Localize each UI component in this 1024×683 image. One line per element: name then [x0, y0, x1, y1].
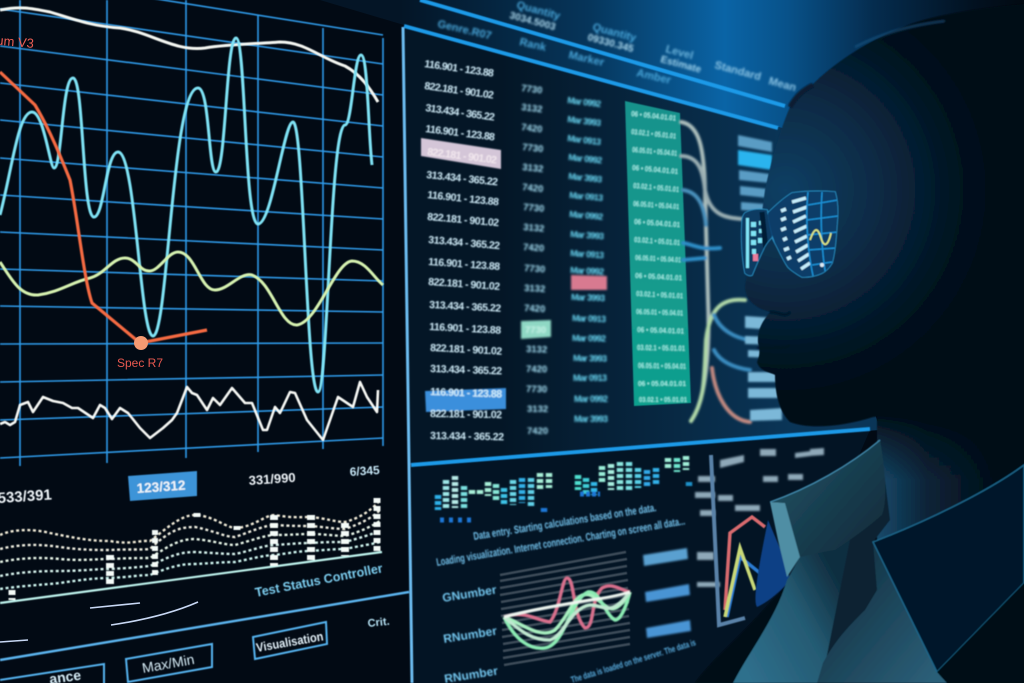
column 2: codes: 3132	[522, 162, 544, 175]
column 1: ranges: 822.181 - 901.02	[424, 80, 495, 102]
status messages: Loading visualization. Internet connection. Charting on screen all data...	[436, 516, 686, 569]
column 1: ranges: 116.901 - 123.88	[427, 189, 500, 209]
chart caption: Test Status Controller	[254, 561, 384, 600]
shirt dark base	[733, 440, 937, 683]
column 3: dates: Mar 0992	[568, 152, 603, 166]
point label: Spec R7	[117, 356, 163, 370]
column 3: dates: Mar 3993	[574, 414, 608, 424]
column 1: ranges: 313.434 - 365.22	[430, 430, 504, 443]
teal column	[625, 101, 691, 406]
column 1: ranges: 313.434 - 365.22	[425, 102, 496, 124]
teal column: 06 • 05.04.01.01	[631, 109, 676, 123]
right collar	[873, 465, 1024, 672]
column 2: codes: 7420	[521, 122, 543, 136]
column 3: dates: Mar 3993	[567, 114, 602, 128]
dot columns	[12, 498, 377, 600]
column 2: codes: 7730	[523, 202, 545, 215]
table headers: Standard	[713, 59, 762, 83]
teal column: 06.05.01 • 05.04.01	[638, 361, 686, 371]
teal column: 03.02.1 • 05.01.01	[637, 343, 685, 353]
dotted wave chart	[0, 498, 382, 603]
highlighted counter	[128, 471, 197, 501]
highlighted blue row: 116.901 - 123.88	[430, 386, 502, 401]
highlighted green code: 7730	[525, 325, 546, 336]
column 1: ranges: 313.434 - 365.22	[426, 169, 499, 189]
teal column: 06.05.01 • 05.04.01	[635, 253, 681, 264]
table panel background	[404, 27, 880, 465]
teal column: 06.05.01 • 05.04.01	[632, 145, 677, 158]
teal column: 06.05.01 • 05.04.01	[633, 199, 679, 211]
column 1: ranges: 313.434 - 365.22	[430, 363, 502, 378]
highlighted green code	[521, 320, 551, 339]
column 3: dates: Mar 0913	[570, 248, 604, 260]
balance button	[0, 664, 104, 683]
column 3: dates: Mar 0992	[570, 265, 604, 277]
column 1: ranges: 313.434 - 365.22	[429, 299, 502, 315]
neck shadow under jaw	[877, 400, 1024, 485]
yellow-green line	[0, 252, 383, 325]
row labels: GNumber	[441, 583, 498, 605]
top header band glow	[320, 0, 1024, 300]
column 2: codes: 3132	[521, 102, 543, 116]
counters row: 331/990	[248, 470, 296, 488]
column 2: codes: 3132	[526, 344, 547, 356]
column 1: ranges: 116.901 - 123.88	[425, 123, 496, 144]
highlighted blue row	[425, 386, 506, 412]
dark jacket	[695, 578, 790, 683]
column 3: dates: Mar 0992	[572, 333, 606, 344]
column 2: codes: 7730	[521, 83, 543, 97]
teal column: 06 • 05.04.01.01	[635, 271, 682, 282]
bar dot chart right	[578, 456, 689, 496]
lips	[757, 312, 790, 348]
table headers: Estimate	[659, 54, 703, 76]
shirt front strip	[733, 538, 850, 683]
row labels	[441, 583, 499, 683]
teal column: 03.02.1 • 05.01.01	[631, 127, 676, 141]
connector curves	[681, 122, 750, 422]
orange line	[0, 72, 207, 350]
collar edge band	[770, 502, 800, 577]
column 3: dates: Mar 3993	[570, 229, 604, 241]
max/min button: Max/Min	[141, 651, 196, 676]
left lens reflection	[741, 208, 772, 276]
status messages: Data entry. Starting calculations based on the data.	[473, 502, 657, 543]
column 3: dates: Mar 0992	[567, 95, 602, 109]
column 2: codes: 7420	[527, 426, 548, 437]
teal column: 06 • 05.04.01.01	[637, 325, 684, 336]
table headers: Marker	[567, 49, 606, 69]
table headers: Rank	[518, 36, 548, 54]
table headers: Mean	[767, 75, 798, 94]
lower shirt	[817, 542, 947, 683]
column 1: ranges: 313.434 - 365.22	[428, 234, 501, 252]
table headers: Quantity	[515, 0, 562, 23]
column 2: codes: 3132	[523, 222, 545, 235]
right lens reflection	[768, 190, 840, 282]
column 3: dates: Mar 0913	[567, 133, 602, 147]
column 3: dates: Mar 0992	[569, 209, 604, 222]
column 2: codes: 7420	[526, 364, 547, 375]
column 1: ranges: 116.901 - 123.88	[428, 256, 501, 273]
cyan oscillating line	[0, 38, 372, 392]
column 3: dates: Mar 3993	[573, 353, 607, 364]
stripe line chart	[500, 552, 630, 665]
table headers: 09330.345	[586, 32, 635, 55]
sketch strokes	[0, 602, 198, 642]
highlighted row	[421, 138, 501, 169]
highlighted row: 822.181 - 901.02	[427, 146, 498, 167]
column 3: dates: Mar 0913	[572, 313, 606, 324]
column 3: dates: Mar 3993	[571, 292, 605, 303]
teal column: 03.02.1 • 05.01.01	[636, 289, 683, 300]
column 3: dates: Mar 0913	[573, 373, 607, 383]
left collar	[770, 440, 885, 577]
person	[695, 4, 1024, 683]
column 1: ranges	[421, 58, 506, 443]
white upper line	[0, 8, 378, 102]
column 2: codes: 7730	[522, 142, 544, 155]
teal column: 03.02.1 • 05.01.01	[634, 235, 680, 247]
column 2: codes: 7730	[526, 384, 547, 395]
value pills	[643, 548, 691, 638]
row labels: RNumber	[442, 624, 498, 646]
column 1: ranges: 116.901 - 123.88	[429, 321, 502, 337]
highlighted red date	[571, 275, 607, 290]
column 3: dates: Mar 0913	[569, 190, 604, 203]
counters row	[0, 463, 380, 507]
column 2: codes: 7420	[524, 303, 546, 315]
column 2: codes: 3132	[524, 283, 546, 295]
column 1: ranges: 822.181 - 901.02	[428, 276, 501, 293]
status labels column	[738, 135, 782, 421]
table headers: 3034.5003	[508, 10, 557, 33]
left chart panel	[0, 0, 383, 466]
status messages	[436, 502, 697, 683]
column 1: ranges: 822.181 - 901.02	[430, 342, 503, 358]
hair edge	[790, 21, 945, 107]
column 1: ranges: 116.901 - 123.88	[424, 58, 495, 80]
blue shirt reflection	[755, 520, 790, 607]
head silhouette	[745, 4, 1024, 426]
teal column: 06 • 05.04.01.01	[634, 217, 680, 229]
column 3: dates	[567, 95, 608, 424]
status messages: The data is loaded on the server. The data is	[570, 637, 697, 683]
column 2: codes: 7420	[523, 242, 545, 254]
table headers: Amber	[635, 67, 673, 87]
white noisy line	[0, 382, 378, 440]
teal column: 06 • 05.04.01.01	[632, 163, 678, 176]
column 2: codes: 3132	[527, 404, 548, 415]
counters row: 6/345	[349, 463, 380, 479]
button row	[0, 616, 390, 683]
chart grid	[0, 0, 383, 466]
column 3: dates: Mar 3993	[568, 171, 603, 185]
bar dot chart left	[438, 473, 549, 520]
highlighted counter: 123/312	[136, 478, 186, 496]
teal column: 06 • 05.04.01.01	[638, 379, 686, 388]
teal column: 03.02.1 • 05.01.01	[639, 395, 687, 404]
sunglasses	[740, 190, 840, 282]
mini line chart	[695, 448, 824, 625]
dark lower right	[937, 583, 1024, 683]
neck	[877, 400, 1024, 683]
table headers: Quantity	[591, 21, 638, 45]
teal column: 03.02.1 • 05.01.01	[633, 181, 679, 194]
column 2: codes: 7420	[522, 182, 544, 195]
column 2: codes	[521, 83, 551, 437]
column 1: ranges: 822.181 - 901.02	[430, 408, 502, 421]
crit label: Crit.	[367, 616, 390, 630]
teal column: 06.05.01 • 05.04.01	[636, 307, 683, 318]
visualisation button: Visualisation	[255, 629, 324, 655]
lower panel background	[411, 430, 870, 683]
table headers: Genre.R07	[436, 18, 493, 42]
table headers	[436, 0, 798, 94]
column 1: ranges: 822.181 - 901.02	[427, 211, 500, 229]
table headers: Level	[664, 43, 695, 62]
visualisation button	[253, 622, 327, 659]
column 2: codes: 7730	[524, 263, 546, 275]
column 3: dates: Mar 0992	[574, 394, 608, 404]
max/min button	[126, 644, 212, 682]
